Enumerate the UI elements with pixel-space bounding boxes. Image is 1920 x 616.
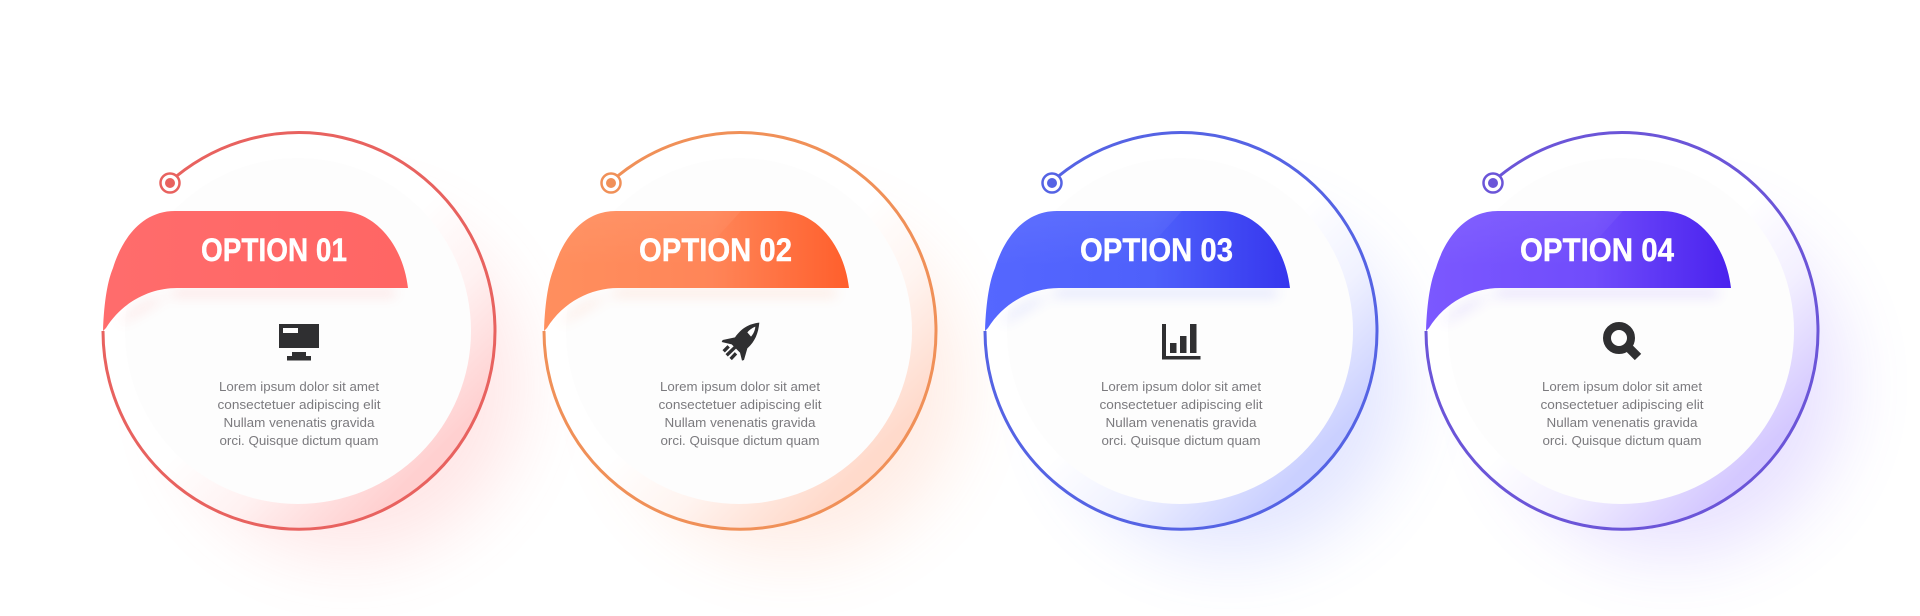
body text: orci. Quisque dictum quam <box>1542 433 1702 448</box>
icon: rocket <box>722 323 759 361</box>
body text: orci. Quisque dictum quam <box>660 433 820 448</box>
banner shadow <box>559 290 836 325</box>
inner disc <box>125 158 471 504</box>
ring with connector <box>985 133 1377 529</box>
body text: consectetuer adipiscing elit <box>218 397 381 412</box>
panel: option 03 <box>985 133 1402 555</box>
body text: Nullam venenatis gravida <box>1546 415 1698 430</box>
banner shadow <box>1000 290 1277 325</box>
panel: option 04 <box>1426 133 1843 555</box>
body text: Lorem ipsum dolor sit amet <box>1542 379 1702 394</box>
ring with connector <box>1426 133 1818 529</box>
panel: option 02 <box>544 133 961 555</box>
ring interior <box>986 134 1376 528</box>
body text: consectetuer adipiscing elit <box>658 397 822 412</box>
banner shadow <box>1441 290 1718 325</box>
inner disc <box>566 158 912 504</box>
soft outer shadow <box>621 215 961 555</box>
ring interior <box>545 134 935 528</box>
connector dot <box>160 174 180 192</box>
icon: bar chart <box>1162 324 1200 360</box>
inner disc shadow <box>104 134 494 528</box>
banner <box>103 211 408 331</box>
body text: Lorem ipsum dolor sit amet <box>219 379 379 394</box>
ring with connector <box>103 133 495 529</box>
body text <box>1100 379 1263 448</box>
banner <box>1426 211 1731 331</box>
soft outer shadow <box>1503 215 1843 555</box>
body text: Nullam venenatis gravida <box>1106 415 1257 430</box>
body text: Nullam venenatis gravida <box>664 415 816 430</box>
body text: Lorem ipsum dolor sit amet <box>660 379 820 394</box>
body text: Lorem ipsum dolor sit amet <box>1101 379 1261 394</box>
body text <box>218 379 381 448</box>
body text <box>1540 379 1704 448</box>
connector dot <box>1042 174 1062 192</box>
icon: monitor <box>279 324 319 360</box>
body text: consectetuer adipiscing elit <box>1540 397 1704 412</box>
heading: OPTION 01 <box>201 232 347 268</box>
inner disc shadow <box>986 134 1376 528</box>
connector dot <box>602 174 620 192</box>
panel: option 01 <box>103 133 520 555</box>
heading: OPTION 03 <box>1080 232 1233 268</box>
body text: orci. Quisque dictum quam <box>1102 433 1260 448</box>
banner shadow <box>118 290 395 325</box>
inner disc shadow <box>545 134 935 528</box>
banner <box>985 211 1290 331</box>
body text: Nullam venenatis gravida <box>224 415 375 430</box>
ring with connector <box>544 133 936 529</box>
icon: magnifier <box>1607 326 1638 357</box>
ring interior <box>1427 134 1817 528</box>
body text: orci. Quisque dictum quam <box>220 433 378 448</box>
heading: OPTION 02 <box>639 232 792 268</box>
connector dot <box>1484 174 1502 192</box>
ring interior <box>104 134 494 528</box>
body text: consectetuer adipiscing elit <box>1100 397 1263 412</box>
body text <box>658 379 822 448</box>
inner disc <box>1007 158 1353 504</box>
inner disc shadow <box>1427 134 1817 528</box>
heading: OPTION 04 <box>1520 232 1674 268</box>
banner facet <box>996 211 1182 266</box>
banner facet <box>1437 211 1623 266</box>
banner facet <box>555 211 741 266</box>
soft outer shadow <box>1062 215 1402 555</box>
banner <box>544 211 849 331</box>
inner disc <box>1448 158 1794 504</box>
soft outer shadow <box>180 215 520 555</box>
